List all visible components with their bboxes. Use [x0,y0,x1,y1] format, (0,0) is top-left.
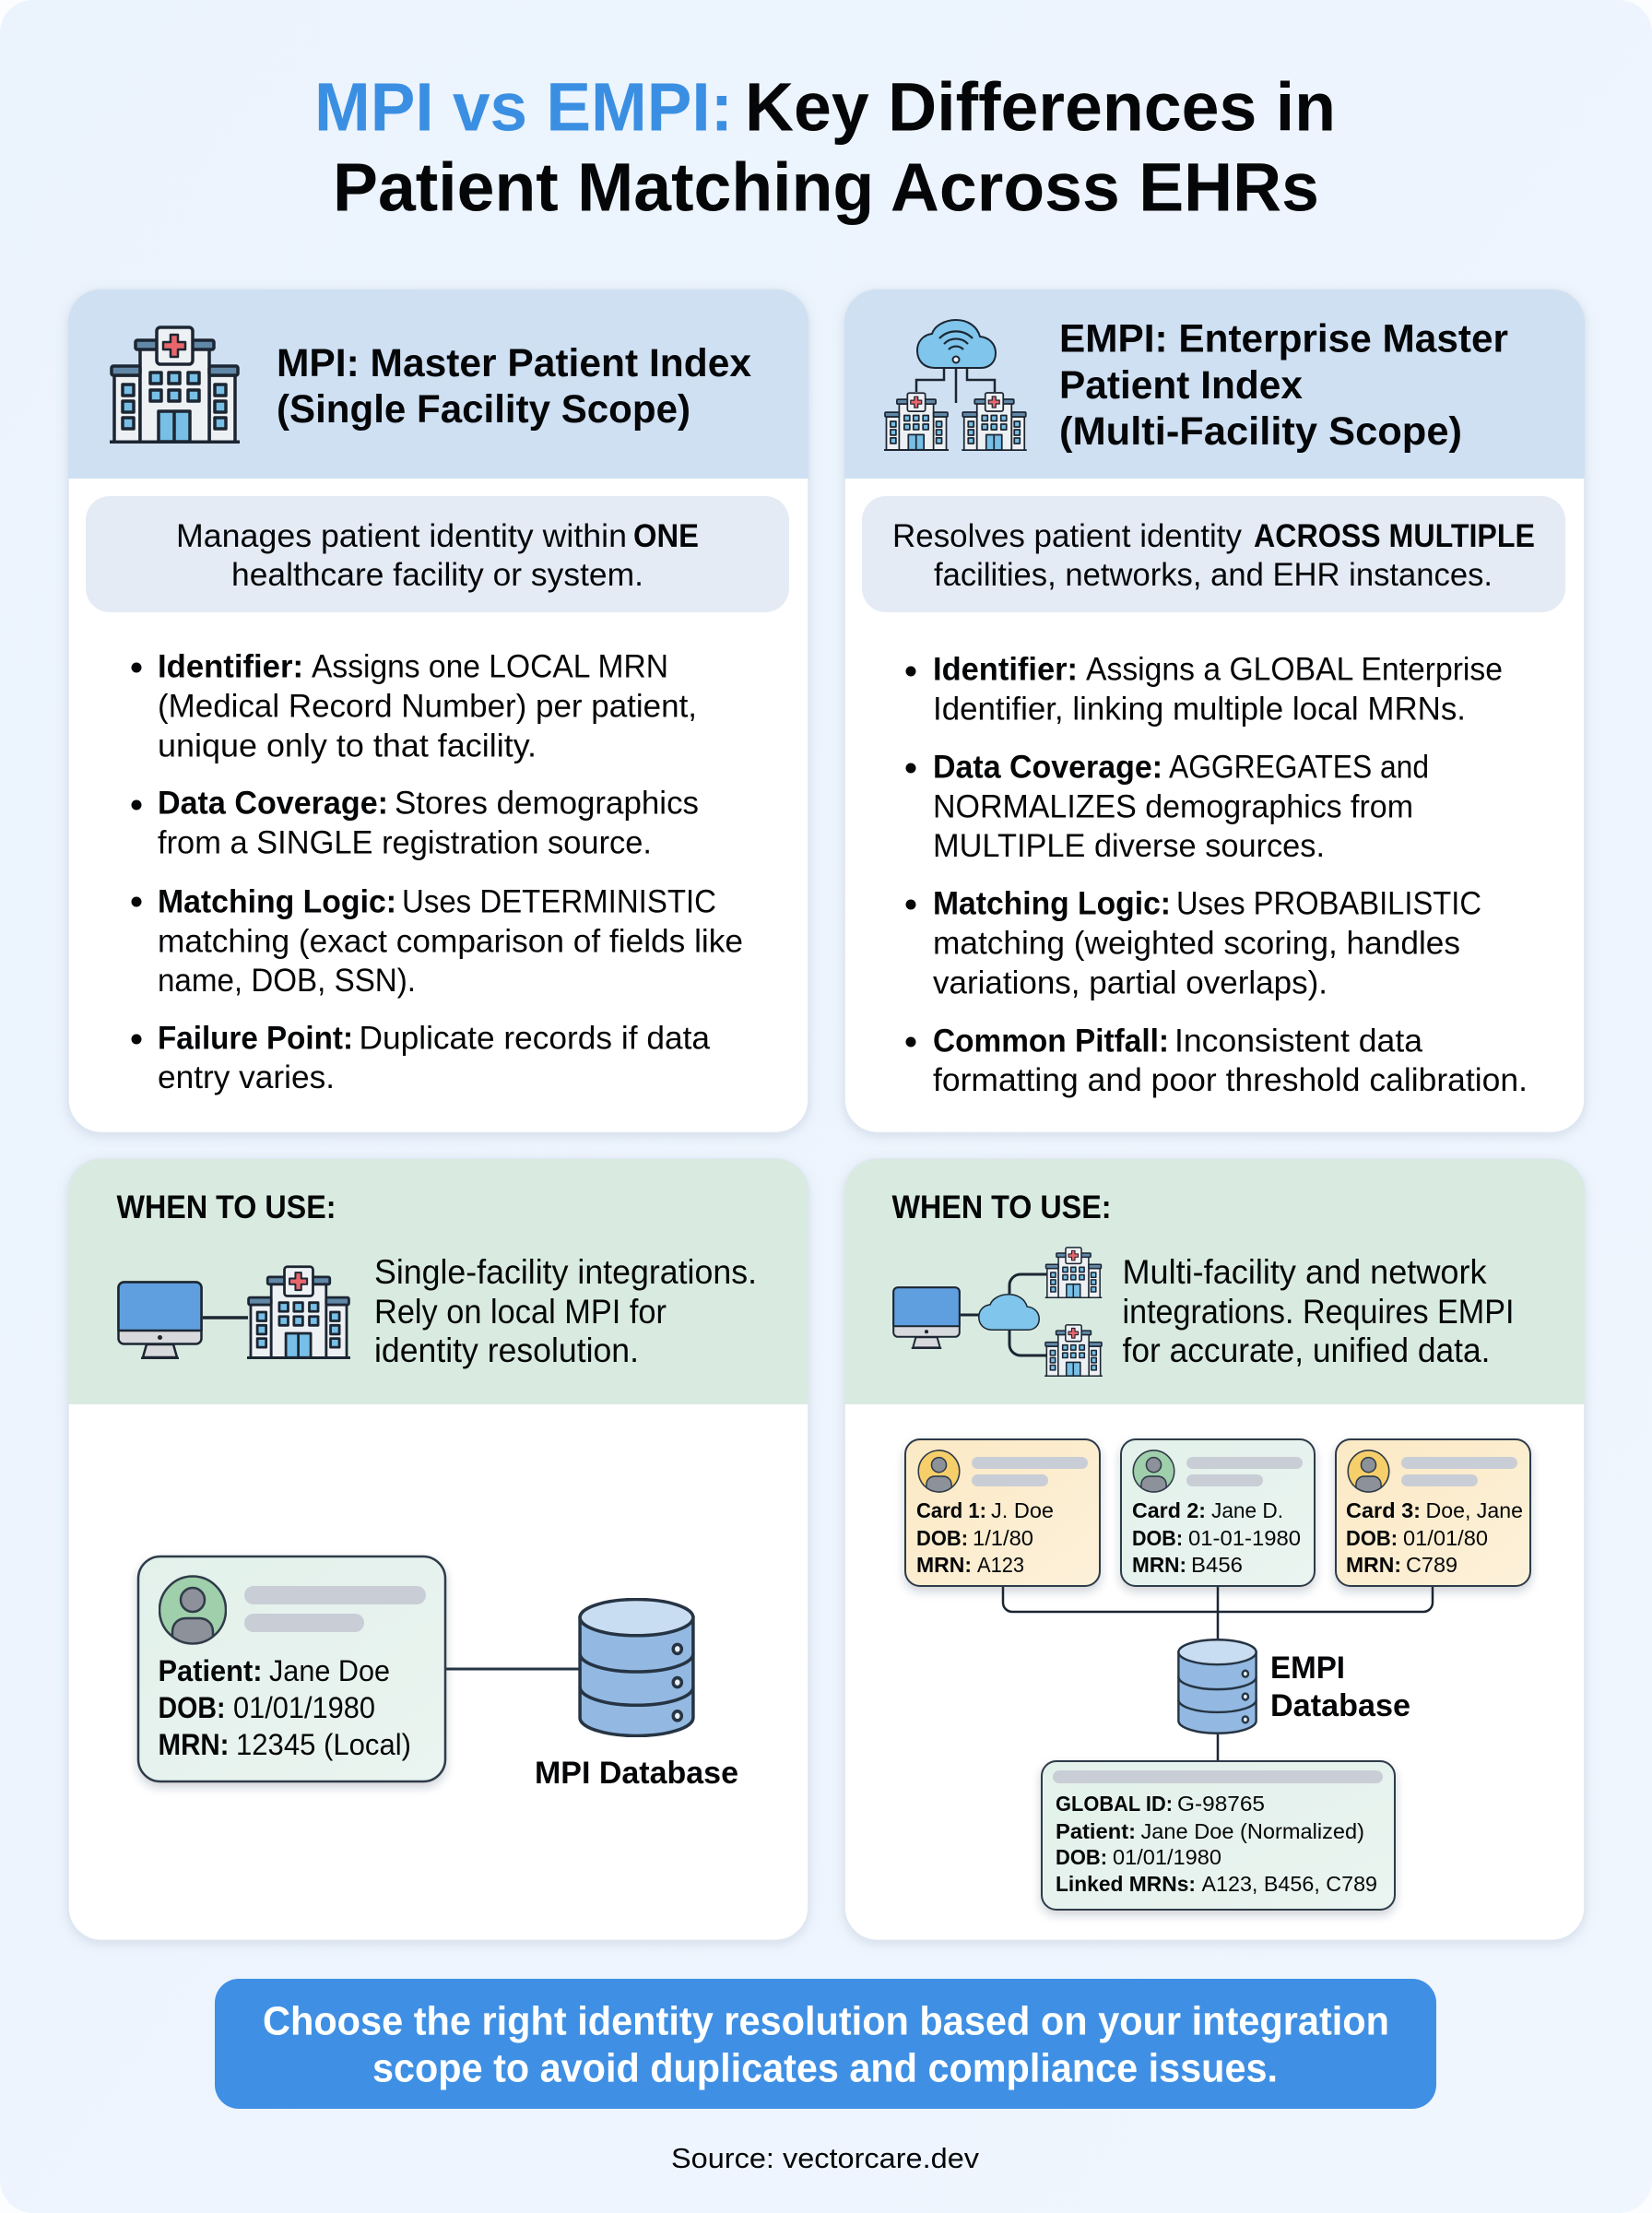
icon: cloud connected to hospitals [884,320,1027,450]
bullet list: EMPI: Common Pitfall: [933,1024,1169,1059]
icon: monitor, cloud and hospitals [893,1248,1103,1377]
panel header: MPI [68,290,808,479]
global record card: Jane Doe (Normalized) [1141,1819,1364,1843]
text: EMPI usage: Multi-facility and network [1123,1253,1487,1291]
icon: EMPI database [1178,1639,1257,1734]
heading: EMPI: Patient Index [1059,363,1303,408]
summary box: EMPI: ACROSS MULTIPLE [1254,518,1535,554]
panel header: EMPI [844,290,1585,479]
patient card: Jane Doe [269,1654,390,1687]
heading: MPI [277,341,751,432]
connector lines [1003,1586,1433,1761]
title: Key Differences in [745,68,1336,146]
text: MPI usage: Single-facility integrations. [374,1253,757,1291]
text: MPI usage: identity resolution. [374,1331,639,1369]
icon: hospital [110,327,240,443]
card 1 [905,1439,1100,1586]
bullet list: MPI: Assigns one LOCAL MRN [312,649,668,684]
text: EMPI usage [1123,1253,1514,1369]
heading: when to use: WHEN TO USE: [892,1189,1112,1225]
bullet list: EMPI: Identifier: [933,651,1078,688]
green header: MPI when to use [68,1159,808,1404]
bullet list: MPI: Stores demographics [395,786,699,821]
bullet list: EMPI: Assigns a GLOBAL Enterprise [1086,651,1503,688]
global record card: DOB: [1056,1845,1107,1869]
card 2: Jane D. [1211,1498,1283,1522]
bullet list: MPI: Duplicate records if data [360,1020,711,1057]
call to action banner [215,1979,1436,2109]
patient card [138,1556,445,1781]
heading: when to use: WHEN TO USE: [116,1189,336,1225]
bullet list: EMPI: variations, partial overlaps). [933,964,1328,1001]
label: EMPI database: Database [1270,1688,1410,1723]
title: Patient Matching Across EHRs [333,149,1319,225]
card 1: 1/1/80 [973,1526,1033,1550]
card 3: Doe, Jane [1425,1498,1523,1522]
panel: EMPI overview [844,290,1585,1132]
bullet list: EMPI: Inconsistent data [1174,1024,1423,1059]
diagram: MPI patient card to database [138,1556,738,1791]
label: MPI database: MPI Database [535,1756,738,1791]
bullet list: EMPI: matching (weighted scoring, handles [933,926,1460,961]
global record card: Linked MRNs: [1056,1872,1196,1896]
bullet list: MPI: Identifier: [158,649,303,684]
global record card: GLOBAL ID: [1056,1792,1173,1816]
global record card: Patient: [1056,1819,1136,1843]
card 2 [1121,1439,1315,1586]
bullet list: MPI: matching (exact comparison of fields like [158,924,743,959]
summary box: MPI: ONE [633,518,699,554]
summary box: EMPI: facilities, networks, and EHR instances. [934,557,1493,593]
card 2: 01-01-1980 [1188,1526,1301,1550]
icon: MPI database [580,1600,693,1735]
heading: EMPI: (Multi-Facility Scope) [1059,409,1462,454]
bullet list: EMPI: formatting and poor threshold calibration. [933,1062,1528,1098]
patient card: MRN: [159,1728,229,1761]
heading: EMPI [1059,317,1508,454]
patient card: 12345 (Local) [236,1728,411,1761]
heading: MPI: MPI: Master Patient Index [277,341,751,385]
text: MPI usage [374,1253,757,1369]
bullet list: EMPI: NORMALIZES demographics from [933,789,1413,824]
card 2: Card 2: [1132,1498,1206,1522]
label: EMPI database [1270,1651,1410,1723]
title: MPI vs EMPI: [314,68,733,146]
card 3: C789 [1406,1553,1457,1577]
green header: EMPI when to use [844,1159,1585,1404]
bullet list: EMPI: MULTIPLE diverse sources. [933,828,1325,864]
patient card: Patient: [159,1654,262,1687]
label: EMPI database: EMPI [1270,1651,1345,1686]
global record card: A123, B456, C789 [1202,1872,1377,1896]
connector line [445,1667,579,1671]
title [314,68,1336,225]
icon: monitor linked to hospital [118,1267,350,1358]
bullet list: MPI: entry varies. [158,1059,335,1095]
card 3: Card 3: [1346,1498,1421,1522]
card 1: J. Doe [991,1498,1054,1522]
bullet list: MPI: unique only to that facility. [158,728,537,763]
call to action banner: scope to avoid duplicates and compliance issues. [372,2045,1278,2091]
source line: Source: vectorcare.dev [671,2142,980,2174]
bullet list: MPI: name, DOB, SSN). [158,963,416,999]
summary box: EMPI [862,496,1565,612]
summary box: MPI: Manages patient identity within [176,518,627,554]
summary box: MPI [86,496,789,612]
diagram: EMPI linking local cards to global record [905,1439,1530,1910]
panel: EMPI when to use [844,1159,1585,1940]
bullet list: EMPI: Data Coverage: [933,749,1162,786]
bullet list: EMPI: AGGREGATES and [1169,749,1429,786]
heading: MPI: (Single Facility Scope) [277,387,690,432]
card 1: Card 1: [916,1498,986,1522]
heading: EMPI: EMPI: Enterprise Master [1059,317,1508,361]
text: EMPI usage: integrations. Requires EMPI [1123,1293,1514,1331]
card 3 [1336,1439,1530,1586]
global record card: 01/01/1980 [1113,1845,1221,1869]
bullet list: EMPI [905,651,1528,1098]
bullet list: EMPI: Identifier, linking multiple local MRNs. [933,692,1466,727]
summary box: EMPI: Resolves patient identity [892,518,1242,554]
card 1: DOB: [916,1526,968,1550]
call to action banner: Choose the right identity resolution based on your integration [263,1999,1389,2043]
card 3: DOB: [1346,1526,1398,1550]
bullet list: EMPI: Matching Logic: [933,885,1171,922]
bullet list: MPI: Data Coverage: [158,786,388,821]
card 1: MRN: [916,1553,972,1577]
text: EMPI usage: for accurate, unified data. [1123,1331,1490,1369]
bullet list: MPI [131,649,743,1095]
card 1: A123 [977,1553,1024,1577]
panel: MPI overview [68,290,808,1132]
bullet list: MPI: Uses DETERMINISTIC [402,883,716,920]
panel: MPI when to use [68,1159,808,1940]
card 2: B456 [1191,1553,1243,1577]
bullet list: MPI: from a SINGLE registration source. [158,824,652,861]
card 2: MRN: [1132,1553,1186,1577]
card 2: DOB: [1132,1526,1183,1550]
text: MPI usage: Rely on local MPI for [374,1293,667,1331]
bullet list: MPI: Failure Point: [158,1020,353,1057]
bullet list: MPI: Matching Logic: [158,883,396,920]
card 3: MRN: [1346,1553,1401,1577]
patient card: DOB: [159,1691,225,1724]
summary box: MPI: healthcare facility or system. [231,557,643,593]
global record card [1042,1761,1395,1910]
bullet list: MPI: (Medical Record Number) per patient, [158,688,697,725]
patient card: 01/01/1980 [233,1691,375,1724]
global record card: G-98765 [1177,1792,1265,1816]
bullet list: EMPI: Uses PROBABILISTIC [1176,885,1481,922]
card 3: 01/01/80 [1403,1526,1488,1550]
